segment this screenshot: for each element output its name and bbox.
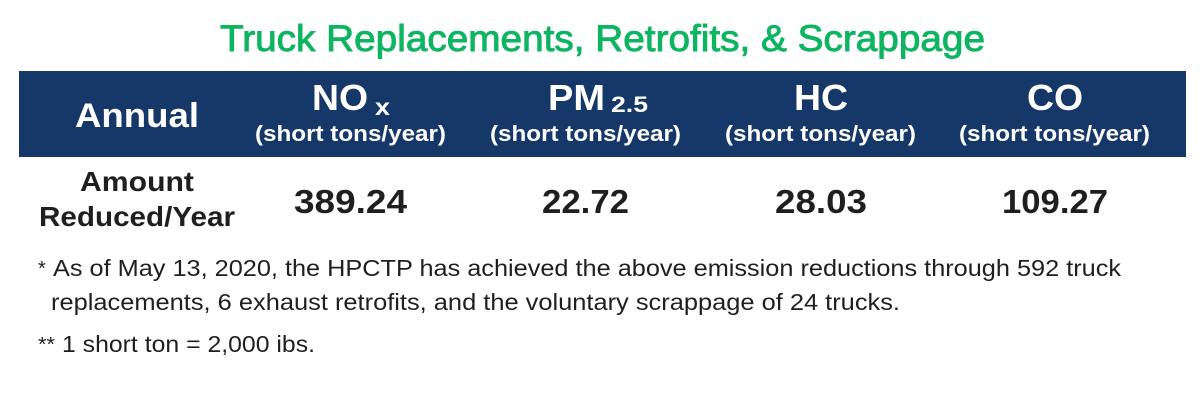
title: Truck Replacements, Retrofits, & Scrappage — [220, 18, 985, 59]
header: PM 2.5 — [490, 77, 681, 146]
header: HC: (short tons/year) — [725, 121, 916, 146]
header: Annual: Annual — [75, 97, 199, 135]
footnote: short ton conversion: 1 short ton = 2,000 ibs. — [62, 331, 315, 357]
value: HC 28.03: 28.03 — [775, 183, 867, 220]
header: HC — [725, 77, 916, 146]
value: PM 2.5 22.72: 22.72 — [542, 183, 629, 220]
row label: Amount Reduced/Year: Reduced/Year — [39, 201, 235, 232]
header: CO — [959, 77, 1150, 146]
footnote: emission reductions — [38, 255, 1121, 315]
footnote: short ton conversion: ** — [38, 334, 55, 356]
table header band — [19, 71, 1186, 157]
header: PM 2.5: PM — [548, 77, 605, 118]
header: PM 2.5: 2.5 — [611, 92, 648, 117]
footnote: emission reductions: As of May 13, 2020, the HPCTP has achieved the above emission reductions through 592 truck — [53, 255, 1121, 281]
value: CO 109.27: 109.27 — [1002, 183, 1108, 220]
header: PM 2.5: (short tons/year) — [490, 121, 681, 146]
value: NOx 389.24: 389.24 — [294, 183, 408, 220]
row label: Amount Reduced/Year: Amount — [80, 166, 194, 197]
header: HC: HC — [794, 77, 848, 118]
header: CO: CO — [1027, 77, 1083, 118]
header: CO: (short tons/year) — [959, 121, 1150, 146]
footnote: emission reductions: replacements, 6 exhaust retrofits, and the voluntary scrappage of 24 trucks. — [51, 289, 900, 315]
header: NOx: x — [375, 94, 390, 120]
header: NOx: NO — [312, 77, 368, 118]
header: NOx: (short tons/year) — [255, 121, 446, 146]
footnote: emission reductions: * — [38, 258, 46, 280]
row label: Amount Reduced/Year — [39, 166, 235, 232]
header: NOx — [255, 77, 446, 146]
